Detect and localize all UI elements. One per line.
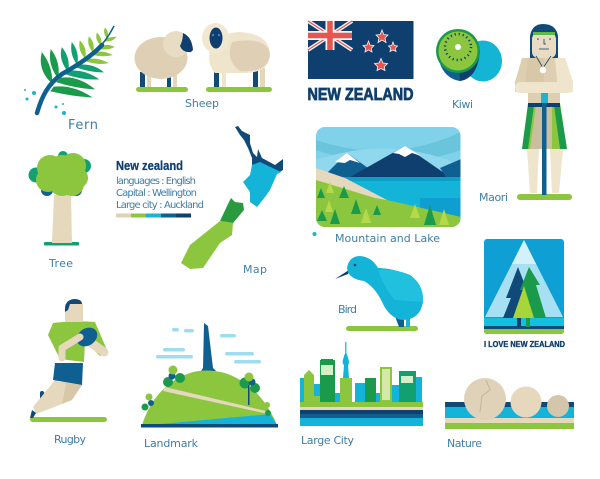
- heading: New Zealand: NEW ZEALAND: [308, 84, 414, 104]
- label: large city: Large City: [301, 434, 354, 447]
- label: nature: Nature: [447, 437, 482, 450]
- label: rugby: Rugby: [54, 433, 86, 446]
- map of New Zealand: [181, 126, 283, 269]
- text block: country facts: [116, 159, 204, 218]
- text block: country facts: languages : English: [116, 176, 196, 187]
- label: fern: Fern: [68, 118, 98, 133]
- text block: country facts: New zealand: [116, 159, 183, 173]
- illustration: mountain and lake: [316, 127, 461, 228]
- label: map: Map: [243, 263, 267, 276]
- illustration: large city: [300, 342, 423, 426]
- icon: sheep left: [134, 31, 193, 92]
- color stripe: [116, 214, 191, 218]
- illustration: landmark hill: [141, 323, 278, 428]
- poster: I love New Zealand: [484, 239, 564, 334]
- poster caption: I LOVE NEW ZEALAND: [484, 339, 565, 349]
- illustration: nature boulders: [445, 378, 574, 429]
- label: Maori: Maori: [479, 191, 508, 204]
- icon: kiwi bird: [335, 256, 423, 331]
- icon: fern: [24, 26, 116, 115]
- label: mountain and lake: Mountain and Lake: [335, 232, 440, 245]
- figure: rugby player: [30, 299, 107, 422]
- text block: country facts: Capital : Wellington: [116, 188, 197, 199]
- label: bird: Bird: [338, 303, 357, 316]
- label: tree: Tree: [48, 257, 73, 270]
- text block: country facts: Large city : Auckland: [116, 200, 204, 211]
- label: landmark: Landmark: [144, 437, 199, 450]
- label: sheep: Sheep: [185, 97, 219, 110]
- flag: [308, 21, 414, 79]
- label: kiwi: Kiwi: [452, 98, 473, 111]
- figure: Maori: [515, 24, 573, 200]
- dot: [312, 232, 316, 236]
- icon: kiwi fruit: [436, 29, 502, 82]
- icon: sheep right: [202, 23, 272, 92]
- icon: tree: [28, 151, 91, 246]
